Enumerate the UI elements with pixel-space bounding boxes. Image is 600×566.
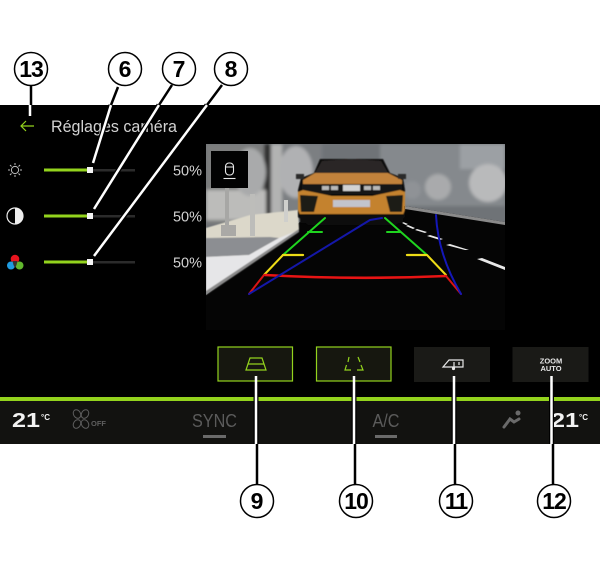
callout 8: 8: [225, 56, 238, 82]
road: [206, 206, 505, 330]
callout 7: 7: [173, 56, 185, 82]
callout 6: [108, 52, 142, 86]
callout 7: [162, 52, 196, 86]
left temperature: 21: [12, 410, 40, 432]
callout line halos on screen: [93, 105, 552, 444]
left temperature: °C: [41, 413, 50, 422]
title: Réglages caméra: [51, 118, 178, 136]
saturation slider: 50%: [173, 256, 202, 272]
icon: seat airflow: [504, 410, 520, 427]
icon: contrast: [7, 208, 23, 224]
right temperature: 21: [551, 410, 579, 432]
callout 12: [538, 484, 570, 518]
icon: fan off: OFF: [91, 419, 106, 428]
road edge and dashes: [405, 206, 505, 225]
callout 6: 6: [119, 56, 131, 82]
callout 9: 9: [251, 488, 263, 514]
callout 13: 13: [19, 56, 43, 82]
brightness slider: [8, 163, 202, 180]
callout lines on screen: [30, 105, 552, 444]
parking guide lines: [249, 215, 461, 294]
button: caravan 11: [414, 347, 490, 382]
callout lines on white: [31, 85, 553, 486]
icon box: car view: [211, 151, 248, 188]
SYNC button: [192, 411, 237, 438]
right temperature: [551, 410, 588, 432]
back arrow: [21, 121, 34, 131]
callout 11: 11: [445, 488, 468, 514]
contrast slider: 50%: [173, 210, 202, 226]
icon: colour circles: [7, 255, 24, 270]
callout 8: [214, 52, 248, 86]
street scenery: [206, 144, 507, 224]
left temperature: [12, 410, 50, 432]
brightness slider: 50%: [173, 164, 202, 180]
callout 10: [340, 484, 372, 518]
button: zoom auto 12: ZOOM: [540, 356, 562, 366]
contrast slider: [7, 208, 202, 226]
icon: fan off: [72, 408, 106, 430]
car: [296, 159, 406, 225]
button: zoom auto 12: [512, 347, 588, 382]
right temperature: °C: [579, 413, 588, 422]
button: guide 9: [218, 347, 292, 381]
button: zoom auto 12: AUTO: [540, 364, 562, 373]
sidewalk: [206, 210, 299, 295]
callout 11: [440, 484, 472, 518]
camera view: [206, 144, 505, 296]
A/C button: [372, 411, 400, 438]
panel: climate bar: [0, 397, 600, 444]
saturation slider: [7, 255, 202, 272]
callout 13: [14, 52, 48, 86]
A/C button: A/C: [372, 411, 400, 431]
icon: sun: [8, 163, 22, 177]
panel: screen: [0, 105, 600, 444]
callout 9: [240, 484, 274, 518]
callout 12: 12: [542, 488, 566, 514]
button: guide 10: [316, 347, 391, 381]
SYNC button: SYNC: [192, 411, 237, 431]
callout 10: 10: [344, 488, 368, 514]
